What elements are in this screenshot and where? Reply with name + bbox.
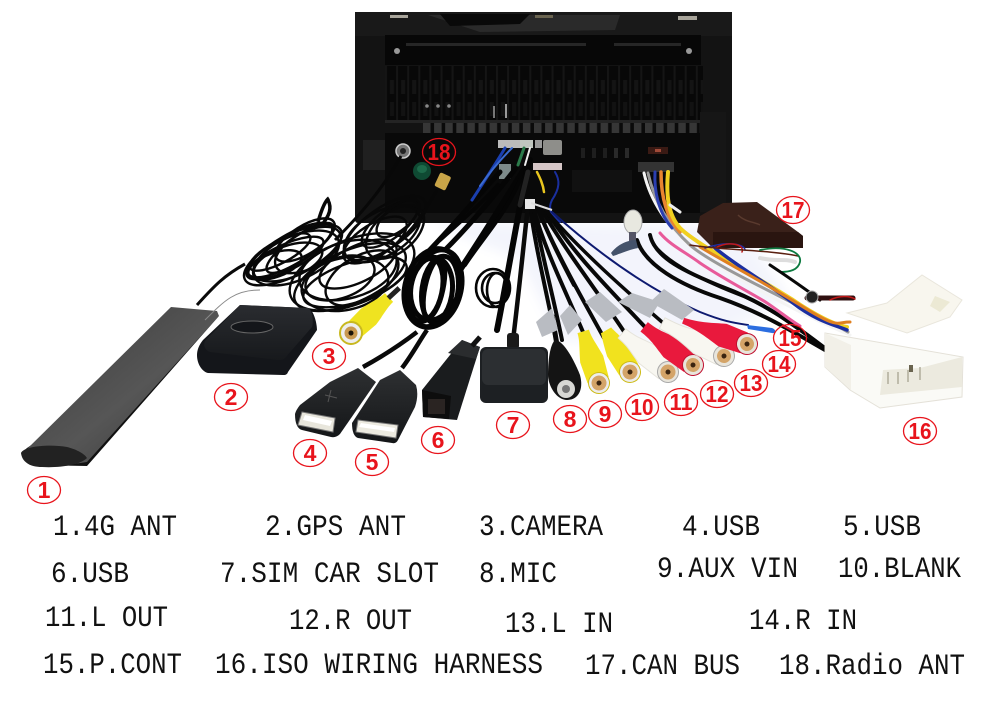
plugs on head unit bbox=[396, 144, 451, 191]
legend item 17: 17.CAN BUS bbox=[585, 650, 740, 684]
callout 10: 10 bbox=[630, 394, 654, 420]
3 camera RCA connector bbox=[335, 280, 407, 349]
2 GPS antenna bbox=[197, 290, 317, 375]
callout 17: 17 bbox=[782, 197, 804, 223]
callout 12: 12 bbox=[706, 381, 728, 407]
14 R IN connector bbox=[679, 309, 761, 359]
legend item 11: 11.L OUT bbox=[45, 602, 168, 636]
callout 18: 18 bbox=[428, 139, 451, 165]
number callouts bbox=[28, 138, 936, 504]
callout 2 bbox=[214, 384, 248, 410]
5 USB connector bbox=[352, 330, 427, 443]
12 R OUT connector bbox=[637, 317, 709, 381]
16 ISO wiring harness connector bbox=[825, 333, 963, 408]
legend item 16: 16.ISO WIRING HARNESS bbox=[215, 649, 543, 683]
legend item 15: 15.P.CONT bbox=[43, 649, 182, 683]
callout 11: 11 bbox=[670, 389, 693, 415]
4 USB connector bbox=[295, 332, 417, 437]
callout 13: 13 bbox=[740, 370, 762, 396]
callout 5 bbox=[356, 448, 388, 476]
10 blank connector bbox=[596, 324, 646, 387]
callout 4: 4 bbox=[304, 440, 317, 466]
callout 6: 6 bbox=[432, 427, 444, 453]
cable bundles bbox=[236, 156, 437, 326]
callout 2: 2 bbox=[225, 384, 237, 410]
wires from head unit connector bbox=[472, 148, 830, 352]
7 SIM card slot bbox=[480, 205, 548, 403]
callout 14: 14 bbox=[768, 351, 791, 377]
callout 1 bbox=[28, 476, 60, 504]
head unit rear bbox=[355, 12, 732, 223]
13 L IN connector bbox=[657, 313, 739, 372]
callout 15: 15 bbox=[778, 325, 802, 351]
callout 1: 1 bbox=[38, 477, 51, 503]
thick cables and coil bbox=[396, 160, 530, 334]
legend item 2: 2.GPS ANT bbox=[265, 511, 406, 545]
legend item 18: 18.Radio ANT bbox=[779, 650, 965, 684]
legend item 8: 8.MIC bbox=[479, 558, 557, 592]
CAN bus box bbox=[697, 202, 803, 248]
small white plug bbox=[611, 210, 642, 256]
legend item 13: 13.L IN bbox=[505, 608, 613, 642]
9 AUX connector bbox=[572, 328, 614, 397]
legend item 1: 1.4G ANT bbox=[53, 511, 177, 545]
cable flags bbox=[536, 289, 694, 337]
legend item 7: 7.SIM CAR SLOT bbox=[220, 558, 439, 592]
legend list bbox=[43, 511, 965, 684]
legend item 4: 4.USB bbox=[682, 511, 760, 545]
1 4G antenna bbox=[21, 264, 245, 467]
callout 7 bbox=[496, 412, 530, 438]
callout 9: 9 bbox=[599, 401, 611, 427]
wiring harness bbox=[644, 172, 855, 335]
callout 3: 3 bbox=[323, 343, 335, 369]
legend item 6: 6.USB bbox=[51, 558, 129, 592]
legend item 12: 12.R OUT bbox=[289, 605, 412, 639]
callout 4 bbox=[294, 440, 326, 466]
15 P.CONT wire tip bbox=[747, 325, 795, 333]
legend item 3: 3.CAMERA bbox=[479, 511, 603, 545]
8 MIC connector bbox=[548, 315, 581, 400]
legend item 14: 14.R IN bbox=[749, 605, 857, 639]
6 USB housing bbox=[422, 337, 480, 420]
callout 6 bbox=[422, 426, 454, 454]
legend item 10: 10.BLANK bbox=[838, 553, 961, 587]
white connector upper bbox=[847, 275, 962, 333]
11 L OUT connector bbox=[614, 324, 684, 388]
legend item 5: 5.USB bbox=[843, 511, 921, 545]
callout 5: 5 bbox=[366, 449, 379, 475]
callout 8 bbox=[554, 406, 586, 432]
callout 8: 8 bbox=[564, 406, 577, 432]
cable tie bbox=[525, 199, 552, 210]
callout 16: 16 bbox=[908, 418, 932, 444]
callout 3 bbox=[312, 342, 346, 370]
legend item 9: 9.AUX VIN bbox=[657, 553, 798, 587]
callout 9 bbox=[588, 400, 622, 428]
callout 7: 7 bbox=[507, 412, 519, 438]
